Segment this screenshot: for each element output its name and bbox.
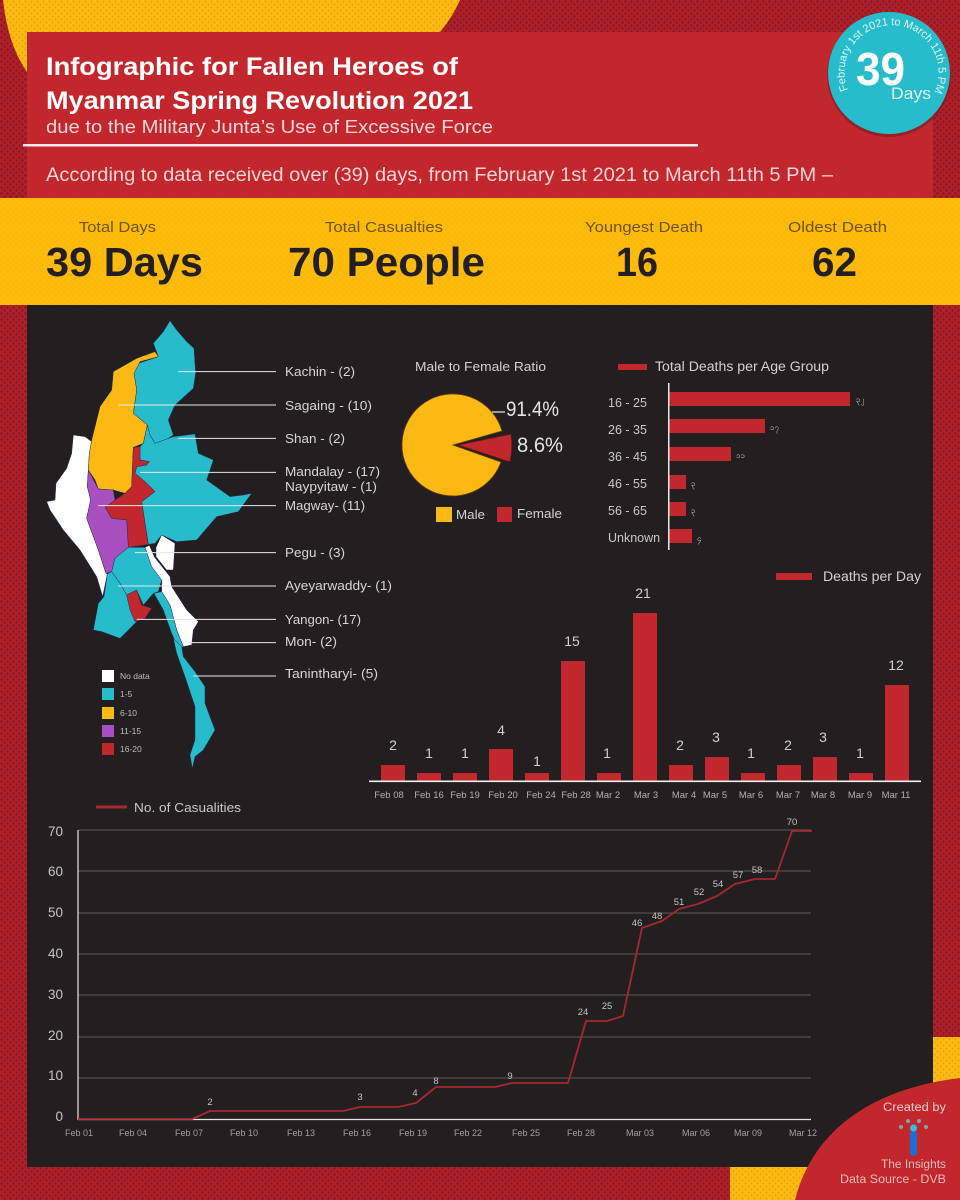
line chart: cumulative casualties: Mar 03	[626, 1128, 654, 1138]
line chart: cumulative casualties: 51	[674, 897, 684, 908]
credits corner: The Insights	[881, 1159, 946, 1171]
title	[46, 53, 473, 115]
header panel	[23, 32, 933, 198]
bar chart: total deaths per age group: ၃	[691, 506, 696, 517]
stat: oldest death: Oldest Death	[788, 219, 887, 236]
map region labels: Pegu - (3)	[285, 545, 345, 560]
bar chart: total deaths per age group	[608, 359, 864, 550]
line chart: cumulative casualties: 8	[433, 1076, 439, 1087]
badge: 39 days: 39	[856, 43, 905, 95]
line chart: cumulative casualties: 70	[48, 824, 63, 839]
bar chart: deaths per day: 15	[564, 633, 580, 649]
bar chart: deaths per day: 3	[819, 729, 827, 745]
stat: total casualties: 70 People	[288, 239, 485, 285]
pie chart: male to female ratio: Male to Female Ratio	[415, 359, 546, 374]
map region labels: Magway- (11)	[285, 498, 365, 513]
pie chart: male to female ratio: Male	[456, 507, 485, 522]
dark main panel	[27, 305, 933, 1167]
bar chart: deaths per day: 12	[888, 657, 904, 673]
line chart: cumulative casualties: Feb 04	[119, 1128, 147, 1138]
bar chart: deaths per day: Mar 3	[634, 790, 658, 801]
credits corner: Created by	[883, 1102, 946, 1114]
map legend: 11-15	[120, 726, 141, 736]
bar chart: deaths per day: Feb 28	[561, 790, 591, 801]
bar chart: deaths per day: Mar 11	[882, 790, 910, 801]
line chart: cumulative casualties: 40	[48, 946, 63, 961]
bar chart: deaths per day: Feb 16	[414, 790, 444, 801]
bar chart: deaths per day: Mar 7	[776, 790, 800, 801]
bar chart: deaths per day: Mar 6	[739, 790, 763, 801]
line chart: cumulative casualties: 46	[632, 918, 642, 929]
bar chart: deaths per day: 1	[603, 745, 611, 761]
stat: oldest death	[788, 219, 887, 285]
line chart: cumulative casualties: 9	[507, 1071, 513, 1082]
bar chart: deaths per day: 1	[747, 745, 755, 761]
subtitle: due to the Military Junta’s Use of Excessive Force	[46, 117, 493, 137]
bar chart: deaths per day: 2	[676, 737, 684, 753]
stat: total days	[46, 219, 203, 285]
bar chart: deaths per day: 1	[533, 753, 541, 769]
map legend: 1-5	[120, 689, 133, 699]
line chart: cumulative casualties: 2	[207, 1097, 213, 1108]
line chart: cumulative casualties: 0	[55, 1109, 63, 1124]
stat: total casualties: Total Casualties	[325, 219, 443, 236]
line chart: cumulative casualties: 24	[578, 1007, 588, 1018]
bar chart: deaths per day: 2	[389, 737, 397, 753]
title: Infographic for Fallen Heroes of	[46, 53, 459, 81]
map region labels: Tanintharyi- (5)	[285, 666, 378, 681]
bar chart: deaths per day: 2	[784, 737, 792, 753]
bar chart: deaths per day: 21	[635, 585, 651, 601]
line chart: cumulative casualties: 57	[733, 870, 743, 881]
map region labels: Shan - (2)	[285, 431, 345, 446]
map region labels: Ayeyarwaddy- (1)	[285, 578, 392, 593]
date range sentence: According to data received over (39) days, from February 1st 2021 to March 11th 5 PM –	[46, 165, 833, 186]
map region labels: Mon- (2)	[285, 634, 337, 649]
bar chart: deaths per day: Mar 5	[703, 790, 727, 801]
line chart: cumulative casualties: Feb 16	[343, 1128, 371, 1138]
map region labels: Naypyitaw - (1)	[285, 479, 377, 494]
line chart: cumulative casualties: 4	[412, 1088, 418, 1099]
bar chart: total deaths per age group: 26 - 35	[608, 423, 647, 437]
line chart: cumulative casualties: Feb 10	[230, 1128, 258, 1138]
map legend	[102, 670, 150, 755]
pie chart: male to female ratio: Female	[517, 506, 562, 521]
map region labels: Kachin - (2)	[285, 364, 355, 379]
stat: youngest death: 16	[616, 239, 658, 285]
credits corner	[795, 1078, 960, 1200]
map legend: No data	[120, 671, 150, 681]
line chart: cumulative casualties: 54	[713, 879, 723, 890]
line chart: cumulative casualties: Feb 25	[512, 1128, 540, 1138]
line chart: cumulative casualties: 20	[48, 1028, 63, 1043]
pie chart: male to female ratio	[402, 359, 563, 522]
badge: 39 days: Days	[891, 84, 931, 103]
line chart: cumulative casualties: 3	[357, 1092, 363, 1103]
bar chart: deaths per day: 4	[497, 722, 505, 738]
bar chart: deaths per day: Mar 2	[596, 790, 620, 801]
line chart: cumulative casualties: Feb 19	[399, 1128, 427, 1138]
bar chart: total deaths per age group: 16 - 25	[608, 396, 647, 410]
stat: total days: Total Days	[79, 219, 156, 236]
line chart: cumulative casualties: 60	[48, 864, 63, 879]
line chart: cumulative casualties: 50	[48, 905, 63, 920]
map region labels	[285, 364, 392, 681]
line chart: cumulative casualties: 58	[752, 865, 762, 876]
bar chart: deaths per day: Feb 20	[488, 790, 518, 801]
line chart: cumulative casualties: 10	[48, 1068, 63, 1083]
bar chart: deaths per day	[369, 569, 921, 801]
bar chart: total deaths per age group: ၁၁	[736, 451, 745, 460]
line chart: cumulative casualties: 48	[652, 911, 662, 922]
bar chart: deaths per day: Deaths per Day	[823, 569, 921, 584]
pie chart: male to female ratio: 8.6%	[517, 434, 563, 457]
map of Myanmar	[47, 321, 276, 768]
stat: oldest death: 62	[812, 239, 857, 285]
stat: total casualties	[288, 219, 485, 285]
bar chart: deaths per day: Feb 19	[450, 790, 480, 801]
bar chart: deaths per day: Feb 08	[374, 790, 404, 801]
bar chart: deaths per day: 1	[461, 745, 469, 761]
line chart: cumulative casualties: No. of Casualities	[134, 800, 242, 815]
line chart: cumulative casualties: Feb 07	[175, 1128, 203, 1138]
map legend: 6-10	[120, 708, 137, 718]
bar chart: deaths per day: Mar 9	[848, 790, 872, 801]
line chart: cumulative casualties: Mar 06	[682, 1128, 710, 1138]
line chart: cumulative casualties: Mar 09	[734, 1128, 762, 1138]
line chart: cumulative casualties: Feb 01	[65, 1128, 93, 1138]
line chart: cumulative casualties: 25	[602, 1001, 612, 1012]
line chart: cumulative casualties: 52	[694, 887, 704, 898]
bar chart: deaths per day: Feb 24	[526, 790, 556, 801]
bar chart: total deaths per age group: ၄	[697, 534, 702, 545]
line chart: cumulative casualties: Mar 12	[789, 1128, 817, 1138]
badge: 39 days	[827, 12, 951, 137]
bar chart: deaths per day: Mar 4	[672, 790, 696, 801]
map region labels: Yangon- (17)	[285, 612, 361, 627]
map region labels: Sagaing - (10)	[285, 398, 372, 413]
pie chart: male to female ratio: 91.4%	[506, 398, 559, 421]
line chart: cumulative casualties: 30	[48, 987, 63, 1002]
line chart: cumulative casualties: Feb 13	[287, 1128, 315, 1138]
credits corner: Data Source - DVB	[840, 1174, 946, 1186]
bar chart: deaths per day: 1	[856, 745, 864, 761]
bar chart: total deaths per age group: ၃	[691, 479, 696, 490]
stat: youngest death	[585, 219, 703, 285]
bar chart: total deaths per age group: 56 - 65	[608, 504, 647, 518]
stat: total days: 39 Days	[46, 239, 203, 285]
bar chart: total deaths per age group: 46 - 55	[608, 477, 647, 491]
stat: youngest death: Youngest Death	[585, 219, 703, 236]
line chart: cumulative casualties: 70	[787, 817, 797, 828]
line chart: cumulative casualties: Feb 28	[567, 1128, 595, 1138]
yellow stats band	[0, 198, 960, 305]
bar chart: total deaths per age group: ၁၇	[770, 423, 779, 434]
map legend: 16-20	[120, 744, 142, 754]
bar chart: deaths per day: 1	[425, 745, 433, 761]
line chart: cumulative casualties	[48, 800, 817, 1138]
line chart: cumulative casualties: Feb 22	[454, 1128, 482, 1138]
icon: The Insights logo	[899, 1119, 928, 1156]
title: Myanmar Spring Revolution 2021	[46, 87, 473, 115]
map region labels: Mandalay - (17)	[285, 464, 380, 479]
bar chart: deaths per day: Mar 8	[811, 790, 835, 801]
bar chart: total deaths per age group: 36 - 45	[608, 450, 647, 464]
bar chart: deaths per day: 3	[712, 729, 720, 745]
bar chart: total deaths per age group: Total Deaths per Age Group	[655, 359, 829, 374]
bar chart: total deaths per age group: Unknown	[608, 531, 660, 545]
badge: 39 days: February 1st 2021 to March 11th 5 PM	[836, 18, 946, 94]
bar chart: total deaths per age group: ၃၂	[856, 395, 864, 406]
